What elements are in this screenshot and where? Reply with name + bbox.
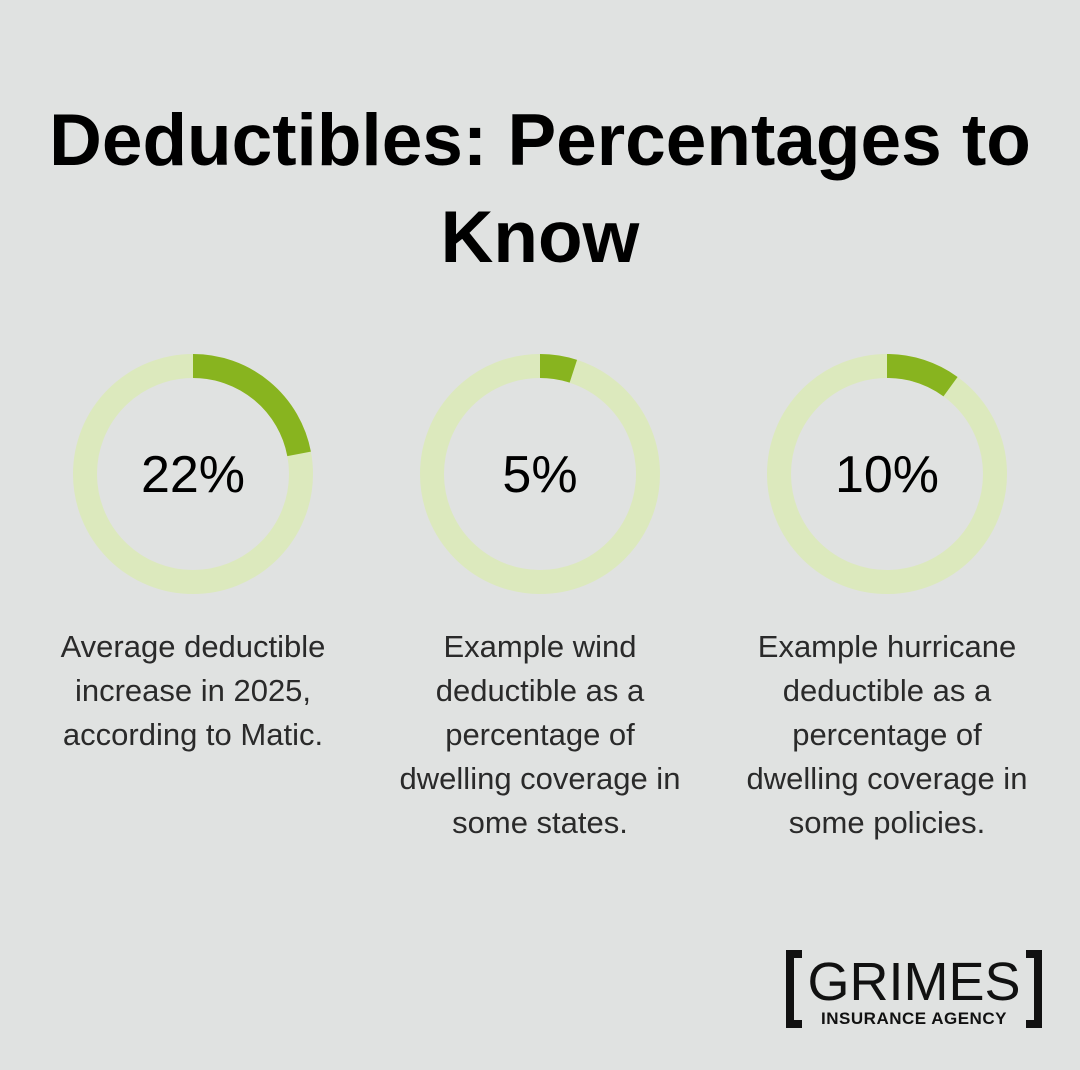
title: Deductibles: Percentages to bbox=[49, 100, 1031, 181]
value labels: 10% bbox=[835, 446, 939, 504]
logo: INSURANCE AGENCY bbox=[821, 1009, 1007, 1028]
donut: 5% bbox=[432, 366, 648, 582]
logo bbox=[786, 950, 1042, 1028]
title bbox=[49, 100, 1031, 278]
description 1: Average deductible increase in 2025, according to Matic. bbox=[61, 629, 325, 752]
description 2: Example wind deductible as a percentage of dwelling coverage in some states. bbox=[400, 629, 680, 840]
donut: 10% bbox=[779, 366, 995, 582]
value labels: 22% bbox=[141, 446, 245, 504]
value labels bbox=[141, 446, 939, 504]
title: Know bbox=[441, 197, 639, 278]
donut: 22% bbox=[85, 366, 301, 582]
logo: GRIMES bbox=[807, 952, 1021, 1012]
value labels: 5% bbox=[502, 446, 578, 504]
description 3: Example hurricane deductible as a percentage of dwelling coverage in some policies. bbox=[747, 629, 1027, 840]
